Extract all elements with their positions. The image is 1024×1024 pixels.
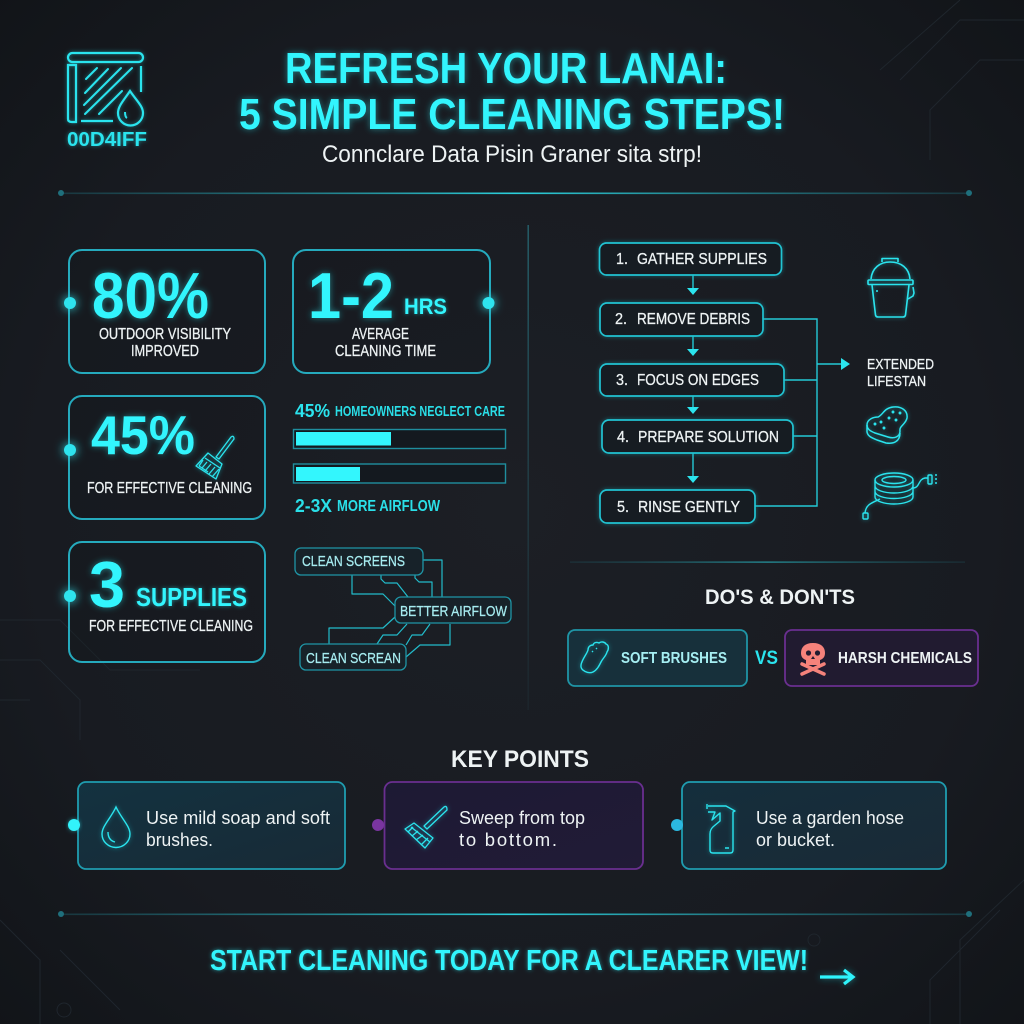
icon: water drop — [102, 807, 130, 848]
node: better airflow — [395, 597, 511, 623]
node: clean screens — [295, 548, 423, 575]
title: 5 SIMPLE CLEANING STEPS! — [239, 90, 785, 139]
icon: bucket — [868, 258, 914, 317]
step 3: FOCUS ON EDGES — [637, 372, 759, 389]
step 3 — [600, 364, 784, 396]
bar chart: homeowners and airflow — [294, 401, 506, 516]
icon: garden hose — [863, 473, 937, 519]
step 5 — [600, 490, 755, 523]
heading: do's and don'ts: DO'S & DON'TS — [705, 586, 855, 609]
key point: mild soap: Use mild soap and soft — [146, 807, 330, 828]
key point: mild soap — [68, 782, 345, 869]
bar chart: homeowners and airflow: 2-3X — [295, 496, 332, 516]
step 1: 1. — [616, 251, 628, 268]
outcome label: EXTENDED — [867, 357, 934, 373]
outcome label — [867, 357, 934, 390]
key point: sweep: to bottom. — [459, 829, 557, 850]
step 5: 5. — [617, 499, 629, 516]
key point: hose or bucket: Use a garden hose — [756, 807, 904, 828]
comparison: soft brushes — [568, 630, 747, 686]
panel: 80% stat: 80% — [92, 259, 209, 332]
comparison: harsh chemicals — [785, 630, 978, 686]
panel: 1-2 hrs stat: AVERAGE — [352, 326, 409, 343]
node: clean screens: CLEAN SCREENS — [302, 553, 405, 570]
icon: spray bottle — [707, 804, 735, 853]
panel: 80% stat: OUTDOOR VISIBILITY — [99, 326, 231, 343]
node: better airflow: BETTER AIRFLOW — [400, 603, 508, 620]
title: REFRESH YOUR LANAI: — [285, 44, 727, 93]
panel: 45% stat: 45% — [91, 404, 195, 466]
key point: hose or bucket: or bucket. — [756, 829, 835, 850]
icon: broom — [196, 436, 234, 479]
key point: hose or bucket — [671, 782, 946, 869]
panel: 80% stat — [64, 250, 265, 373]
node: clean screan — [300, 644, 406, 670]
panel: 1-2 hrs stat — [293, 250, 494, 373]
panel: 80% stat: IMPROVED — [131, 343, 199, 360]
heading: key points: KEY POINTS — [451, 746, 589, 773]
key point: sweep: Sweep from top — [459, 807, 585, 828]
panel: 3 supplies stat: FOR EFFECTIVE CLEANING — [89, 618, 253, 635]
panel: 1-2 hrs stat: 1-2 — [308, 259, 394, 332]
step 2: 2. — [615, 311, 627, 328]
flowchart: five steps — [600, 243, 850, 523]
panel: 3 supplies stat — [64, 542, 265, 662]
arrow — [820, 970, 853, 984]
icon: sponge — [867, 407, 907, 443]
versus label: VS — [755, 648, 778, 669]
node: clean screan: CLEAN SCREAN — [306, 650, 401, 667]
step 2 — [600, 303, 763, 336]
key point: sweep — [372, 782, 643, 869]
diagram: clean screens to better airflow — [295, 548, 511, 670]
step 2: REMOVE DEBRIS — [637, 311, 750, 328]
step 4: 4. — [617, 429, 629, 446]
bar chart: homeowners and airflow: MORE AIRFLOW — [337, 498, 441, 515]
icon: broom — [405, 806, 447, 848]
panel: 3 supplies stat: SUPPLIES — [136, 582, 247, 612]
step 1: GATHER SUPPLIES — [637, 251, 767, 268]
subtitle: Connclare Data Pisin Graner sita strp! — [322, 141, 702, 168]
key point: mild soap: brushes. — [146, 829, 213, 850]
comparison: harsh chemicals: HARSH CHEMICALS — [838, 650, 972, 667]
step 1 — [600, 243, 782, 275]
logo icon — [68, 53, 143, 126]
panel: 45% stat — [64, 396, 265, 519]
icon: skull and crossbones — [801, 643, 825, 674]
outcome label: LIFESTAN — [867, 374, 926, 390]
step 4: PREPARE SOLUTION — [638, 429, 779, 446]
title — [239, 44, 785, 139]
panel: 1-2 hrs stat: HRS — [404, 294, 447, 319]
panel: 3 supplies stat: 3 — [89, 548, 125, 621]
step 3: 3. — [616, 372, 628, 389]
logo label: 00D4IFF — [67, 129, 147, 151]
step 5: RINSE GENTLY — [638, 499, 740, 516]
step 4 — [602, 420, 793, 453]
bar chart: homeowners and airflow: 45% — [295, 401, 330, 421]
panel: 45% stat: FOR EFFECTIVE CLEANING — [87, 480, 252, 497]
icon: brush hand — [581, 642, 608, 673]
bar chart: homeowners and airflow: HOMEOWNERS NEGLECT CARE — [335, 404, 505, 420]
panel: 1-2 hrs stat: CLEANING TIME — [335, 343, 436, 360]
call to action: START CLEANING TODAY FOR A CLEARER VIEW! — [210, 945, 808, 977]
comparison: soft brushes: SOFT BRUSHES — [621, 650, 727, 667]
